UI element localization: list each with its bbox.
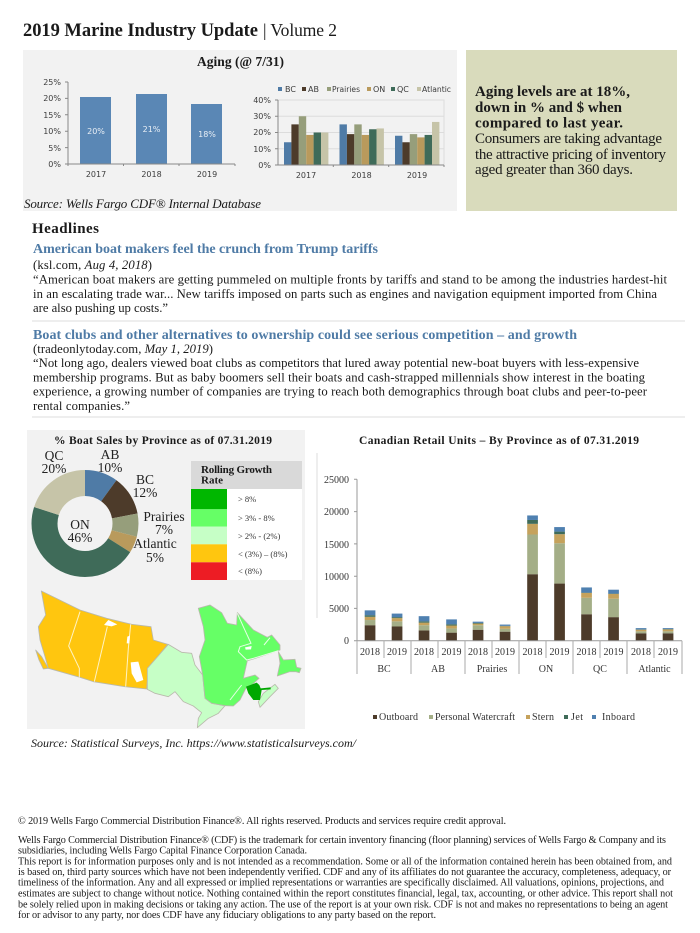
bar chart: aging overall: 20% [43,94,61,103]
donut labels: 12% [133,485,157,500]
x axis labels: Atlantic [638,664,671,675]
legend: rolling growth rate: > 2% - (2%) [238,531,280,541]
bar chart: aging overall: 15% [43,111,61,120]
bar chart: aging overall: 20% [87,127,105,136]
heading: aging: Aging (@ 7/31) [197,54,284,69]
x axis labels: 2018 [468,647,488,658]
legend: boat types: Jet [571,712,583,723]
map: Canada growth by province [36,591,301,728]
stacked bar chart: retail units [324,475,682,723]
bar chart: aging by province: 2019 [407,171,427,180]
bar chart: aging by province: 30% [253,112,271,121]
callout: aging levels: Aging levels are at 18%, [475,84,630,100]
legend: boat types: Inboard [602,712,635,723]
heading: headlines: Headlines [32,221,99,237]
donut labels: Prairies [143,509,185,524]
legend: boat types [373,712,635,723]
donut labels: 10% [98,460,122,475]
x axis labels: 2018 [360,647,380,658]
map: Newfoundland [277,652,301,676]
donut labels: 46% [68,530,92,545]
footer: copyright: © 2019 Wells Fargo Commercial Distribution Finance®. All rights reserved. Products and services require credit approval. [18,816,506,827]
donut labels: BC [136,472,154,487]
article: tariffs: (ksl.com, Aug 4, 2018) [33,258,152,272]
callout: aging levels: compared to last year. [475,116,623,132]
donut labels: 7% [155,522,173,537]
y axis labels: 25000 [324,475,349,486]
title: | Volume 2 [263,20,337,40]
x axis labels: 2019 [387,647,407,658]
bar chart: aging overall: 0% [48,160,61,169]
source: aging: Source: Wells Fargo CDF® Internal Database [24,196,261,211]
bar chart: aging overall: 2018 [141,170,162,179]
x axis labels: 2018 [522,647,542,658]
x axis labels: BC [377,664,391,675]
legend: provinces: ON [373,85,385,94]
article: boat clubs: (tradeonlytoday.com, May 1, 2019) [33,342,213,356]
bar chart: aging overall: 18% [198,130,216,139]
map: Nova Scotia [258,684,278,707]
map: Ontario [147,644,225,728]
callout: aging levels: the attractive pricing of inventory [475,147,666,163]
x axis labels: ON [539,664,553,675]
y axis labels: 20000 [324,507,349,518]
footer: disclaimer: for or advisor to any party, nor does CDF have any fiduciary obligations to any party based on the report. [18,910,436,921]
legend: boat types: Outboard [379,712,418,723]
donut labels: 5% [146,550,164,565]
footer: disclaimer: timeliness of the information. Any and all expressed or implied representations or warranties are specifically disclaimed. All valuations, opinions, projections, and [18,878,664,888]
footer: disclaimer: is based on, third party sources which have not been independently verified. CDF and any of its affiliates do not guarantee the accuracy, completeness, adequacy, or [18,867,672,878]
article: boat clubs: experience, a growing number of companies are trying to reach both demographics through boat clubs and peer-to-peer [33,384,648,398]
bar chart: aging overall: 2019 [197,170,217,179]
map: western provinces [36,591,168,689]
x axis labels: 2019 [442,647,462,658]
callout: aging levels: aged greater than 360 days. [475,162,633,178]
legend: rolling growth rate: < (3%) – (8%) [238,549,288,559]
donut labels: 20% [42,461,66,476]
bar chart: aging by province: 2018 [351,171,372,180]
panel: boat sales by province [27,430,305,729]
footer: disclaimer: be solely relied upon in making decisions or taking any action. The use of the report is at your own risk. CDF is not and makes no representations to being an agent [18,900,668,910]
article: boat clubs: Boat clubs and other alternatives to ownership could see serious competition – and growth [33,328,577,343]
x axis labels: 2018 [414,647,434,658]
x axis labels: QC [593,664,607,675]
article: boat clubs [33,328,648,413]
stacked bars [365,515,673,641]
footer: disclaimer: This report is for information purposes only and is not intended as a recommendation. Some or all of the information contained herein has been obtained from, and [18,856,672,868]
bar chart: aging by province: 10% [253,145,271,154]
donut labels: Atlantic [133,536,177,551]
title: 2019 Marine Industry Update [23,21,258,41]
y axis labels: 15000 [324,540,349,551]
x axis labels: 2018 [631,647,651,658]
article: tariffs [33,242,667,315]
legend: provinces: Prairies [332,85,360,94]
article: tariffs: are also pushing up costs.” [33,301,168,315]
panel: aging charts [23,50,457,211]
callout: aging levels [466,50,677,211]
legend: provinces: AB [308,85,319,94]
article: boat clubs: “Not long ago, dealers viewed boat clubs as competitors that lured away potential new-boat buyers with less-expensive [33,356,639,370]
legend: boat types: Stern [532,712,554,723]
legend: boat types: Personal Watercraft [435,712,515,723]
x axis labels: 2018 [576,647,596,658]
footer: disclaimer [18,835,673,921]
map: New Brunswick [246,683,271,700]
bar chart: aging overall: 2017 [86,170,106,179]
bar chart: aging overall: 5% [48,144,61,153]
bar chart: aging by province: 20% [253,128,271,137]
x axis labels: AB [431,664,445,675]
legend: provinces [278,85,451,94]
footer: disclaimer: Wells Fargo Commercial Distribution Finance® (CDF) is the trademark for certain inventory financing (floor planning) services of Wells Fargo & Company and its [18,835,666,846]
bar chart: aging by province: 40% [253,96,271,105]
x axis labels: 2019 [604,647,624,658]
legend: rolling growth rate: Rolling Growth [201,464,272,476]
article: tariffs: “American boat makers are getting pummeled on multiple fronts by tariffs and stand to be among the industries hardest-hit [33,272,667,286]
legend: rolling growth rate: > 8% [238,494,256,504]
heading: boat sales: % Boat Sales by Province as of 07.31.2019 [54,435,272,447]
donut labels: ON [70,517,90,532]
y axis labels: 5000 [329,604,349,615]
article: boat clubs: membership programs. But as baby boomers sell their boats and cash-strapped millennials show interest in the boating [33,370,646,384]
legend: provinces: BC [285,85,296,94]
footer: disclaimer: estimates are subject to change without notice. Nothing contained within the report constitutes financial, legal, tax, accounting, or other advice. This report shall not [18,888,673,900]
bar chart: aging overall: 10% [43,127,61,136]
article: tariffs: American boat makers feel the crunch from Trump tariffs [33,242,379,257]
donut labels [42,447,185,565]
donut chart [44,483,126,564]
article: tariffs: in an escalating trade war... New tariffs imposed on parts such as engines and navigation equipment imported from China [33,287,657,301]
bar chart: aging overall: 21% [143,125,161,134]
footer: disclaimer: subsidiaries, including Wells Fargo Capital Finance Corporation Canada. [18,846,307,856]
legend: rolling growth rate: > 3% - 8% [238,513,275,523]
bar chart: aging by province [253,85,451,180]
y axis labels: 0 [344,636,349,647]
legend: provinces: QC [397,85,409,94]
bar chart: aging overall [43,78,235,179]
donut labels: AB [101,447,119,462]
legend: rolling growth rate [191,461,302,580]
legend: rolling growth rate: Rate [201,474,223,486]
bar chart: aging by province: 0% [258,161,271,170]
callout: aging levels: Consumers are taking advantage [475,131,662,147]
x axis labels: 2019 [658,647,678,658]
legend: provinces: Atlantic [422,85,451,94]
x axis labels: 2019 [550,647,570,658]
donut labels: QC [45,448,63,463]
bar chart: aging overall: 25% [43,78,61,87]
map: eastern provinces [147,605,301,728]
x axis labels: 2019 [495,647,515,658]
callout: aging levels: down in % and $ when [475,100,623,116]
y axis labels [324,475,349,647]
source: statistical surveys: Source: Statistical Surveys, Inc. https://www.statisticalsurveys.com/ [31,736,358,750]
heading: retail units: Canadian Retail Units – By Province as of 07.31.2019 [359,435,639,447]
y axis labels: 10000 [324,572,349,583]
x axis labels: Prairies [477,664,507,675]
bar chart: aging by province: 2017 [296,171,316,180]
legend: rolling growth rate: < (8%) [238,566,262,576]
x axis labels [360,647,678,675]
map: Quebec and Labrador [198,605,280,706]
article: boat clubs: rental companies.” [33,399,130,413]
